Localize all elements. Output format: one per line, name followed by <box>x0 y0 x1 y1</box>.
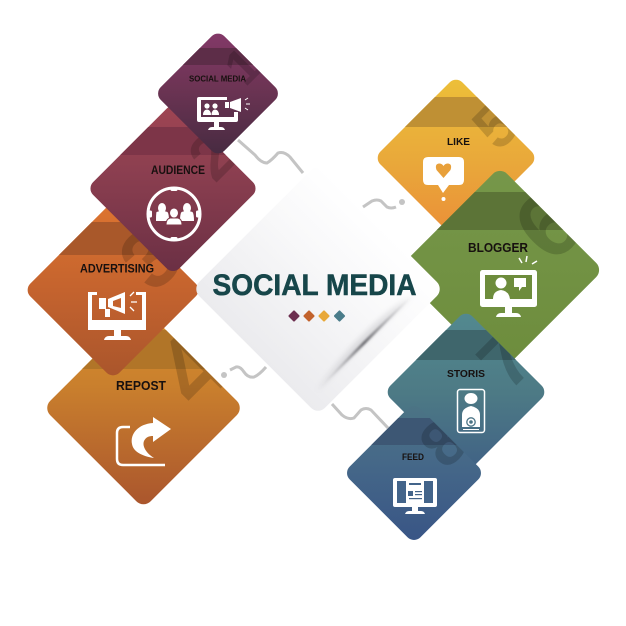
number 6: 6 <box>495 172 603 280</box>
icon: blogger on monitor <box>480 256 537 317</box>
label: audience: AUDIENCE <box>151 165 205 177</box>
number 2: 2 <box>174 118 250 194</box>
connector: storis to center <box>332 404 388 428</box>
icon: news feed monitor <box>393 478 437 514</box>
connector: social media to center <box>238 140 303 173</box>
number 7: 7 <box>461 316 549 404</box>
label: blogger: BLOGGER <box>468 240 529 255</box>
panel: storis <box>388 314 544 464</box>
icon: audience target <box>148 187 200 241</box>
number 4: 4 <box>134 308 253 427</box>
fold shadow <box>324 299 408 384</box>
number 1: 1 <box>213 36 273 96</box>
connector: repost to center <box>221 367 266 378</box>
title: SOCIAL MEDIA <box>212 269 416 302</box>
label: social media: SOCIAL MEDIA <box>189 74 246 84</box>
panel: blogger <box>410 170 600 358</box>
panel: advertising <box>28 208 198 376</box>
number 8: 8 <box>405 405 481 481</box>
panel: feed <box>347 412 481 540</box>
label: like: LIKE <box>447 137 470 148</box>
connector: like to center <box>363 199 405 208</box>
icon: share arrow <box>117 417 171 465</box>
label: advertising: ADVERTISING <box>80 262 154 276</box>
label: feed: FEED <box>402 452 424 463</box>
panel: audience <box>90 107 256 271</box>
icon: megaphone on monitor <box>88 292 146 340</box>
panel: like <box>378 80 534 226</box>
panel: social media <box>158 34 278 154</box>
panel: repost <box>47 328 240 504</box>
number 3: 3 <box>100 208 200 308</box>
number 5: 5 <box>459 89 533 163</box>
panel: center <box>196 221 440 411</box>
label: repost: REPOST <box>116 378 166 393</box>
decorative diamonds <box>288 310 345 322</box>
label: storis: STORIS <box>447 368 485 380</box>
icon: monitor with audience and megaphone <box>197 97 250 130</box>
icon: heart speech bubble <box>423 157 464 201</box>
icon: story card <box>458 390 484 432</box>
